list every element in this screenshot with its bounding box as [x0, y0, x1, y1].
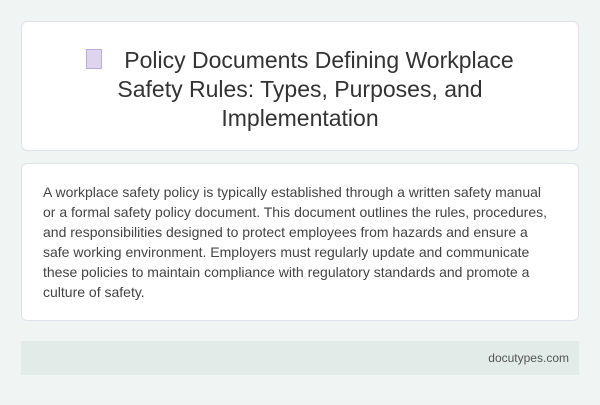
description text: A workplace safety policy is typically established through a written safety manual or a formal safety policy document. This document outlines the rules, procedures, and responsibilities designed to protect employees from hazards and ensure a safe working environment. Employers must regularly update and communicate these policies to maintain compliance with regulatory standards and promote a culture of safety. — [43, 184, 547, 300]
icon: document — [86, 49, 102, 69]
footer source: docutypes.com — [488, 351, 569, 365]
description panel — [21, 163, 579, 321]
footer bar — [21, 341, 579, 375]
title: Policy Documents Defining Workplace Safety Rules: Types, Purposes, and Implementation — [117, 47, 514, 131]
title panel — [21, 21, 579, 151]
